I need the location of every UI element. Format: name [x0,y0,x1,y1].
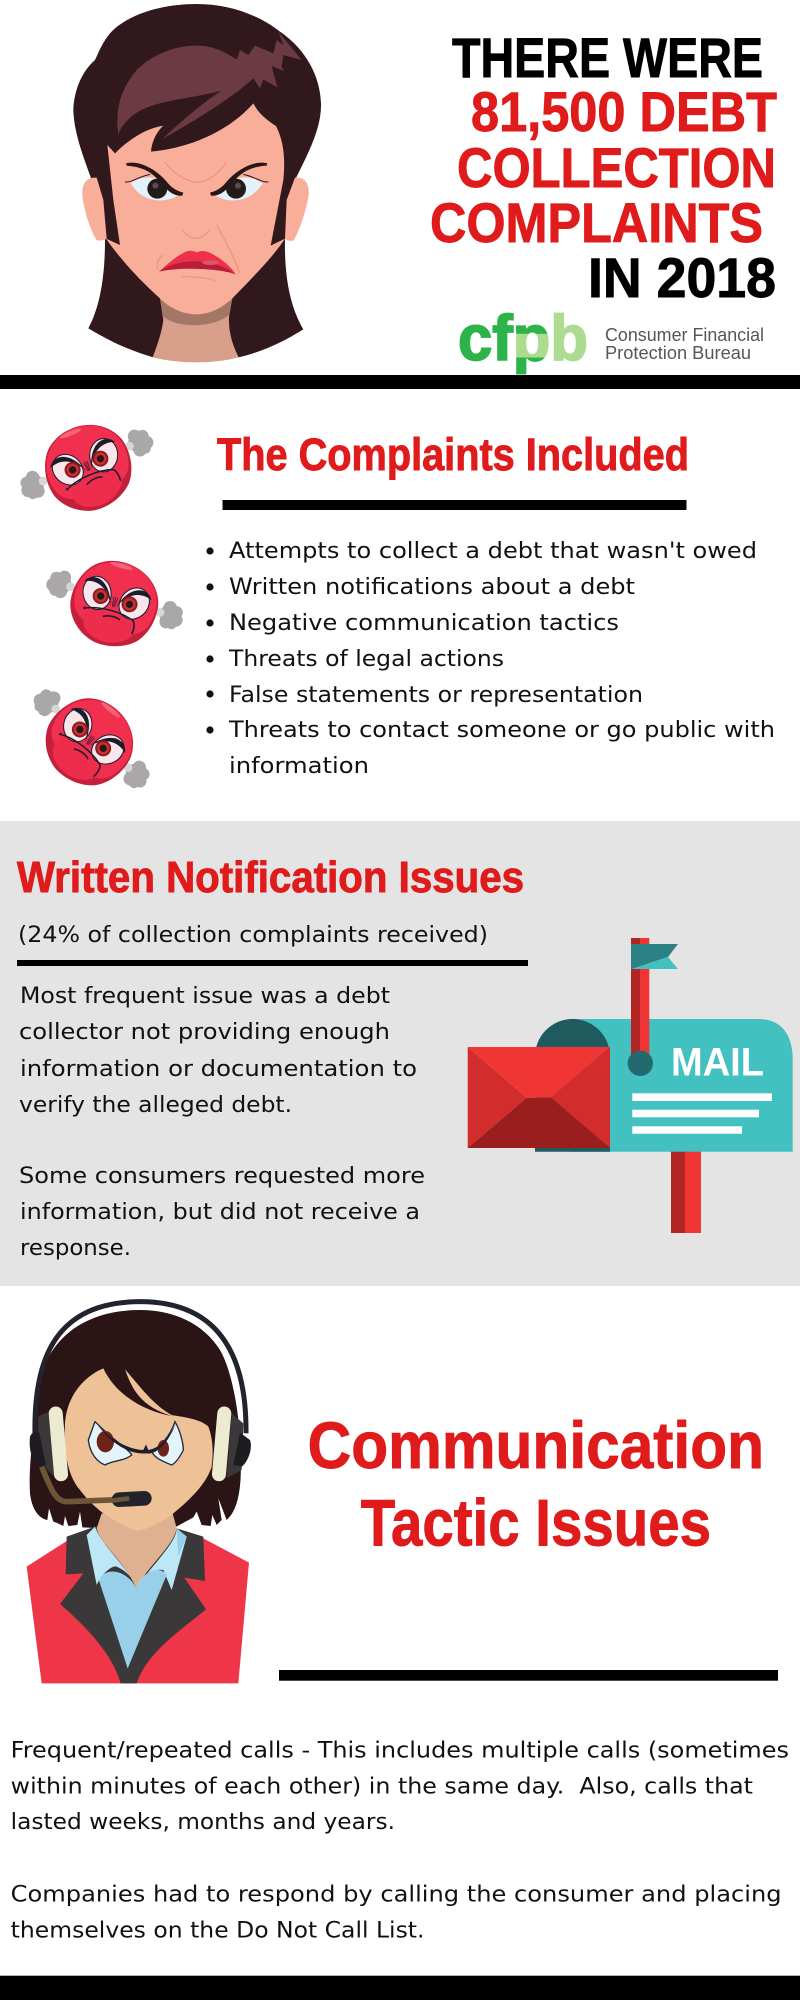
complaints bullet list: information [229,754,369,779]
panel rule [17,960,528,966]
complaints bullet list [206,539,775,779]
text block: communication tactics: lasted weeks, months and years. [11,1810,395,1835]
title: COMPLAINTS [430,191,763,254]
heading: written notification issues: Written Notification Issues [17,853,524,902]
heading: communication tactic issues [308,1408,764,1560]
illustration: angry call centre agent with headset [27,1302,251,1683]
logo: cfpb: cfpb [458,302,588,374]
panel body text: response. [20,1236,131,1261]
complaints bullet list: False statements or representation [229,683,643,708]
panel body text: Some consumers requested more [19,1164,425,1189]
text block: communication tactics: within minutes of each other) in the same day. Also, calls that [11,1775,753,1800]
panel body text: information, but did not receive a [20,1200,420,1225]
illustration: angry woman face [73,4,321,362]
heading rule [279,1670,778,1681]
panel body text: information or documentation to [20,1057,417,1082]
footer bar [0,1976,800,2000]
logo: cfpb: Consumer Financial [605,324,764,345]
heading: the complaints included: The Complaints Included [217,429,689,480]
title: IN 2018 [588,246,776,309]
text block: communication tactics: Frequent/repeated calls - This includes multiple calls (sometimes [11,1739,789,1764]
panel body text: Most frequent issue was a debt [20,984,390,1009]
title [430,26,777,309]
heading: communication tactic issues: Communication [308,1408,764,1482]
panel: written notification issues [0,821,800,1286]
illustration: mailbox [468,938,793,1233]
heading: communication tactic issues: Tactic Issues [361,1486,711,1560]
heading rule [222,500,686,510]
subheading: 24 percent: (24% of collection complaints received) [18,923,488,948]
complaints bullet list: Written notifications about a debt [229,575,635,600]
panel body text: collector not providing enough [19,1020,390,1045]
panel body text: verify the alleged debt. [19,1093,292,1118]
illustration: mailbox: MAIL [671,1041,764,1085]
logo: cfpb: Protection Bureau [605,342,751,363]
icon: angry emoji 1 [6,402,169,534]
icon: angry emoji 2 [34,543,194,664]
text block: communication tactics: themselves on the Do Not Call List. [11,1919,424,1944]
panel body text [19,984,425,1261]
icon: angry emoji 3 [7,664,171,819]
logo: cfpb [458,302,764,374]
complaints bullet list: Threats to contact someone or go public with [228,718,775,743]
complaints bullet list: Negative communication tactics [229,611,619,636]
text block: communication tactics [11,1739,789,1944]
complaints bullet list: Threats of legal actions [228,647,504,672]
complaints bullet list: Attempts to collect a debt that wasn't owed [229,539,757,564]
header divider bar [0,375,800,389]
text block: communication tactics: Companies had to respond by calling the consumer and placing [11,1883,782,1908]
